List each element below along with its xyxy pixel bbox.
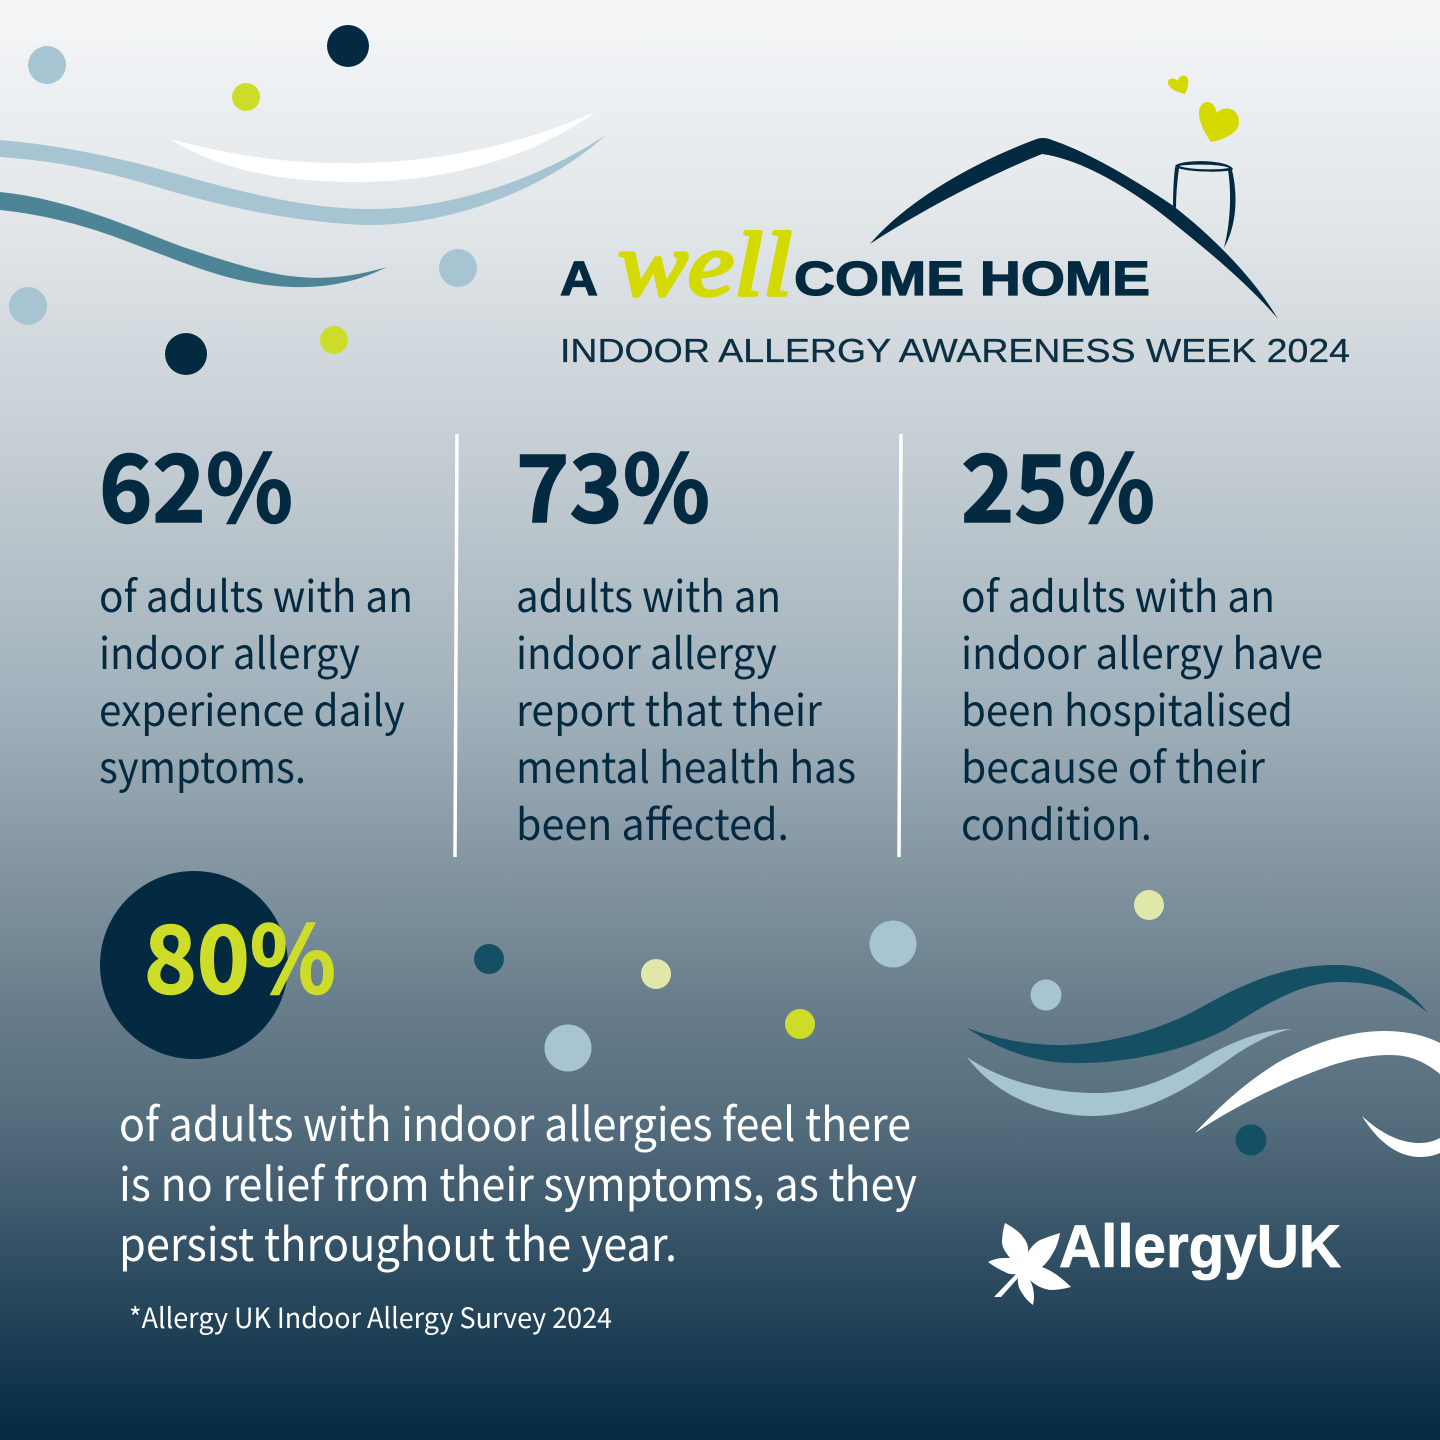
teal wave: [0, 192, 387, 287]
campaign logo: house roof with title: [560, 76, 1350, 370]
number badge circle: [100, 871, 288, 1059]
number: 25%: [961, 414, 1155, 549]
Allergy UK logo: [988, 1213, 1341, 1305]
number: 73%: [516, 414, 710, 549]
description: condition.: [961, 791, 1152, 853]
description: symptoms.: [99, 734, 306, 796]
top-left decoration: waves and dots: [0, 25, 606, 375]
panel: 62% statistic: [99, 414, 413, 796]
description: of adults with an: [99, 563, 413, 625]
description: indoor allergy: [99, 620, 360, 682]
number: 62%: [99, 414, 293, 549]
description: been affected.: [516, 791, 789, 853]
icon: small heart: [1168, 76, 1188, 94]
description: because of their: [961, 734, 1265, 796]
title: well: well: [618, 214, 792, 315]
description: indoor allergy have: [961, 620, 1323, 682]
dots: [9, 25, 477, 375]
icon: chimney: [1173, 161, 1236, 248]
description: is no relief from their symptoms, as they: [119, 1149, 917, 1215]
description: of adults with an: [961, 563, 1275, 625]
subtitle: INDOOR ALLERGY AWARENESS WEEK 2024: [560, 333, 1350, 370]
dots: [1030, 890, 1266, 1156]
logo wordmark: AllergyUK: [1059, 1213, 1341, 1280]
icon: large heart: [1199, 102, 1239, 142]
middle dots: [474, 920, 916, 1072]
description: [99, 563, 413, 796]
white wave: [1195, 1031, 1440, 1133]
panel: 25% statistic: [961, 414, 1323, 853]
description: report that their: [516, 677, 822, 739]
icon: roof shape: [870, 138, 1278, 319]
description: mental health has: [516, 734, 856, 796]
description: [961, 563, 1323, 853]
panel: 73% statistic: [516, 414, 856, 853]
column dividers: [455, 434, 901, 857]
white wave tail: [1362, 1116, 1440, 1157]
description: experience daily: [99, 677, 405, 739]
description: adults with an: [516, 563, 781, 625]
light blue wave: [0, 135, 606, 225]
number: 80%: [144, 885, 336, 1020]
light blue wave: [967, 1029, 1292, 1116]
dark teal wave: [967, 965, 1428, 1063]
description: indoor allergy: [516, 620, 777, 682]
bottom-right decoration: waves and dots: [967, 890, 1440, 1157]
description: of adults with indoor allergies feel there: [119, 1089, 911, 1155]
panel: 80% statistic: [100, 871, 917, 1275]
icon: leaf: [988, 1223, 1071, 1305]
description: persist throughout the year.: [119, 1209, 677, 1275]
title: come home: COME HOME: [794, 253, 1150, 306]
description: [119, 1089, 917, 1275]
description: [516, 563, 856, 853]
footnote: *Allergy UK Indoor Allergy Survey 2024: [129, 1297, 612, 1337]
white wave: [170, 112, 595, 182]
description: been hospitalised: [961, 677, 1293, 739]
title: A: A: [560, 253, 598, 306]
